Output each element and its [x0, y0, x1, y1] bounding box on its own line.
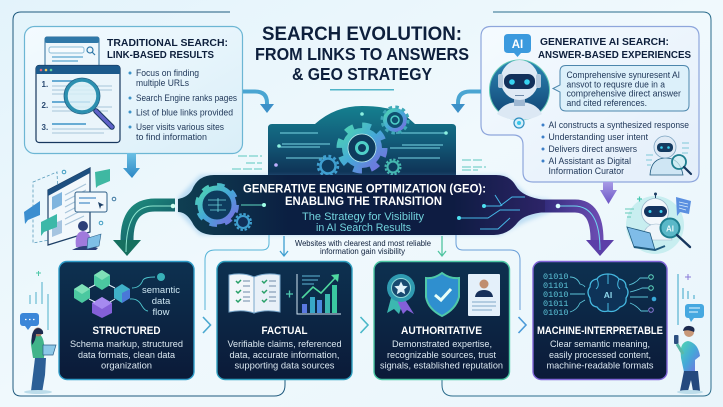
card: authoritative: [374, 262, 510, 380]
card body: [380, 338, 503, 370]
plus sign: [286, 290, 293, 298]
arrow: banner to structured: [113, 204, 175, 256]
icon: lower left gear: [318, 156, 338, 176]
icon: central gear: [340, 126, 384, 170]
banner glow: [178, 175, 550, 235]
bullet list: User visits various sites: [136, 122, 224, 133]
binary digits: 01011: [543, 299, 569, 309]
card body: data formats, clean data: [78, 349, 176, 360]
bullet list: List of blue links provided: [136, 108, 233, 118]
card title: STRUCTURED: [92, 325, 161, 337]
icon: browser windows with magnifier: 2.: [42, 101, 48, 110]
connector right: [456, 235, 520, 310]
icon text: semantic data flow: semantic: [142, 285, 180, 296]
illustration: man with phone: [674, 274, 704, 394]
chevron 1: [203, 317, 210, 333]
chevron 2: [360, 317, 368, 333]
panel: traditional search: [24, 26, 242, 154]
card body: recognizable sources, trust: [387, 349, 496, 360]
icon: robot portrait: [490, 60, 550, 128]
caption: Websites with clearest and most reliable: [295, 239, 431, 248]
icon text: semantic data flow: [142, 285, 180, 318]
card body: Schema markup, structured: [70, 338, 183, 349]
illustration: web page with user: [24, 168, 116, 250]
card body: machine-readable formats: [546, 360, 654, 370]
banner subheading: The Strategy for Visibility: [302, 211, 424, 223]
bullet list: [128, 68, 237, 143]
panel heading: GENERATIVE AI SEARCH:: [540, 36, 669, 48]
GEO banner: [178, 175, 545, 235]
arrow: traditional panel down: [123, 153, 140, 178]
icon: award ribbon: [387, 274, 415, 314]
title: SEARCH EVOLUTION:: [262, 24, 462, 45]
icon: banner gear left: [197, 185, 266, 230]
speech bubble: comprehensive direct answer: [566, 88, 681, 98]
panel heading: LINK-BASED RESULTS: [107, 49, 214, 61]
decorative circuits left of engine: [232, 156, 262, 169]
icon: lower right gear: [386, 160, 400, 174]
bullet list: Search Engine ranks pages: [136, 93, 237, 104]
card body: Verifiable claims, referenced: [228, 338, 342, 349]
icon: profile card: [468, 274, 500, 316]
icon: AI badge: AI: [512, 39, 523, 51]
icon: upper gear: [382, 107, 408, 133]
card body: data, accurate information,: [230, 349, 340, 360]
panel heading: [538, 36, 691, 61]
title: & GEO STRATEGY: [292, 64, 432, 84]
card body: easily processed content,: [549, 349, 651, 360]
card body: [228, 338, 342, 370]
icon: banner circuit right: [457, 195, 525, 229]
card title: FACTUAL: [262, 325, 308, 337]
card body: [546, 338, 654, 370]
bullet list: Information Curator: [548, 166, 624, 177]
icon: browser windows with magnifier: 3.: [42, 123, 48, 132]
illustration: robot with laptop: AI: [666, 224, 674, 234]
card body: Demonstrated expertise,: [392, 338, 492, 349]
illustration: woman with laptop: [20, 271, 56, 394]
binary digits: 01010: [543, 290, 569, 300]
card title: MACHINE-INTERPRETABLE: [537, 325, 663, 337]
caption: information gain visibility: [320, 247, 405, 256]
banner subheading: [302, 211, 424, 234]
speech bubble: [553, 66, 689, 111]
card body: [70, 338, 183, 370]
icon: browser windows with magnifier: [36, 37, 120, 142]
card: machine-interpretable: [533, 262, 667, 380]
chevron 3: [518, 317, 526, 333]
bullet list: AI constructs a synthesized response: [548, 120, 689, 131]
speech bubble: and cited references.: [566, 98, 647, 108]
decorative circuits right of engine: [462, 160, 486, 170]
title: [255, 24, 469, 90]
bullet list: Understanding user intent: [548, 132, 648, 143]
illustration: robot with laptop: [625, 192, 691, 254]
icon: growth chart: [297, 274, 341, 314]
banner heading: GENERATIVE ENGINE OPTIMIZATION (GEO):: [243, 184, 486, 196]
icon: shield: [426, 273, 459, 316]
card body: Clear semantic meaning,: [550, 338, 650, 349]
icon text: semantic data flow: data: [152, 296, 171, 307]
binary digits: [543, 272, 569, 318]
speech bubble: Comprehensive synuresent AI: [566, 70, 680, 80]
arrow: to authoritative: [438, 236, 446, 256]
bullet list: [542, 120, 689, 177]
caption: [295, 239, 431, 256]
panel: generative AI search: [481, 26, 699, 182]
card: factual: [217, 262, 352, 380]
connector left: [205, 235, 269, 310]
banner subheading: in AI Search Results: [316, 222, 411, 234]
bullet list: AI Assistant as Digital: [548, 156, 631, 167]
speech bubble: ansvot to requsre due in a: [566, 80, 665, 90]
card body: supporting data sources: [234, 360, 335, 370]
card body: signals, established reputation: [380, 360, 503, 370]
title: FROM LINKS TO ANSWERS: [255, 44, 469, 64]
arrow: generative panel down: [600, 182, 617, 204]
card: structured: [59, 262, 194, 380]
card body: organization: [101, 360, 152, 370]
banner heading: [243, 184, 486, 208]
arrow: traditional panel to engine: [243, 92, 274, 113]
bullet list: Delivers direct answers: [548, 144, 637, 155]
arrow: banner to machine-interpretable: [540, 204, 614, 256]
panel heading: [107, 37, 228, 61]
banner heading: ENABLING THE TRANSITION: [285, 196, 442, 208]
binary digits: 01010: [543, 272, 569, 282]
outer frame right: [442, 12, 711, 396]
bullet list: to find information: [136, 132, 207, 143]
panel heading: TRADITIONAL SEARCH:: [107, 37, 228, 49]
icon: checklist book: [229, 274, 280, 313]
card title: AUTHORITATIVE: [401, 325, 482, 337]
binary digits: 01010: [543, 308, 569, 318]
bullet list: multiple URLs: [136, 78, 189, 89]
icon: AI brain: AI: [604, 290, 612, 300]
icon: small robot with magnifier: [646, 136, 691, 175]
icon: AI badge: [504, 34, 531, 57]
panel heading: ANSWER-BASED EXPERIENCES: [538, 49, 691, 61]
arrow: generative panel to engine: [451, 92, 481, 113]
icon: semantic data cubes: [74, 270, 165, 318]
icon: browser windows with magnifier: 1.: [42, 80, 48, 89]
arrow: to factual: [280, 236, 288, 256]
binary digits: 01101: [543, 281, 569, 291]
outer frame left: [13, 12, 285, 396]
bullet list: Focus on finding: [136, 68, 199, 79]
icon text: semantic data flow: flow: [153, 307, 170, 318]
engine tower: [268, 106, 456, 178]
